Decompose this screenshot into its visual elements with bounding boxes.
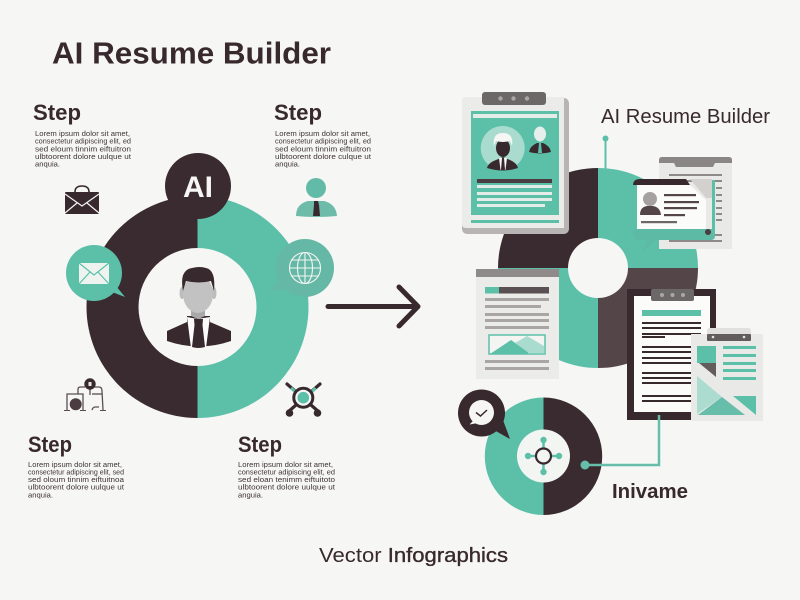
footer caption: Vector Infographics (319, 545, 508, 567)
icon: target with spokes (286, 384, 321, 417)
panel: small document (691, 328, 763, 421)
panel: clipboard (627, 289, 716, 420)
icon: person with tie (296, 178, 337, 217)
right heading: AI Resume Builder (601, 106, 770, 128)
step text: bottom right: ulbtoorent dolore uulque ut (238, 482, 336, 492)
step text: bottom left: Lorem ipsum dolor sit amet, (28, 460, 122, 469)
icon: network machine (64, 378, 106, 410)
step text: top right (274, 100, 372, 168)
step text: bottom left (28, 432, 125, 500)
step text: bottom right: consectetur adipiscing elit, ed (238, 468, 335, 476)
step text: bottom right: Lorem ipsum dolor sit amet, (238, 460, 333, 469)
icon: chat check bubble (458, 390, 510, 439)
pin above right donut (602, 136, 608, 170)
step text: bottom right (238, 432, 336, 500)
connector line (580, 415, 659, 470)
AI badge: AI (183, 171, 213, 204)
small donut chart (485, 398, 602, 515)
step text: top left (33, 100, 132, 168)
step text: top right: Step (274, 100, 322, 125)
panel: speech card with avatar (633, 179, 715, 252)
step text: bottom right: anguia. (238, 490, 263, 500)
icon: briefcase (65, 186, 99, 214)
left donut chart (87, 196, 309, 418)
title: AI Resume Builder (52, 36, 331, 70)
panel: profile card (462, 92, 569, 234)
step text: top right: Lorem ipsum dolor sit amet, (275, 129, 370, 138)
step text: top left: consectetur adipiscing elit, ed (35, 136, 131, 146)
panel: back document (659, 157, 732, 249)
step text: bottom right: Step (238, 432, 282, 457)
step text: top left: ulbtoorent dolore uulque ut (35, 152, 132, 161)
right donut chart (498, 168, 698, 368)
step text: top right: ulbtoorent dolore culque ut (275, 152, 372, 161)
arrow (328, 287, 418, 326)
step text: top right: sed eloum tinnim eiftuitron (275, 144, 371, 154)
icon: globe bubble (268, 239, 334, 297)
step text: top left: sed eloum tinnim eiftuitron (35, 144, 131, 154)
panel: article document (476, 269, 559, 379)
icon: mail bubble (66, 245, 125, 301)
step text: bottom left: consectetur adipiscing elit, sed (28, 468, 124, 476)
step text: bottom left: anquia. (28, 490, 53, 500)
AI badge (165, 153, 231, 219)
step text: bottom right: sed eloan tenimm eiftuitoto (238, 475, 335, 484)
step text: top right: anquia. (275, 160, 300, 168)
step text: bottom left: Step (28, 432, 72, 457)
step text: top left: Step (33, 100, 81, 125)
icon: businessman (167, 267, 231, 348)
icon: network hub (525, 437, 562, 475)
label: Inivame: Inivame (612, 481, 688, 503)
step text: bottom left: sed oloum tinnim eiftuitnoa (28, 475, 125, 484)
step text: top left: Lorem ipsum dolor sit amet, (35, 129, 130, 138)
step text: top left: anquia. (35, 160, 60, 168)
step text: top right: consectetur adipiscing elit, ed (275, 136, 371, 146)
step text: bottom left: ulbtoorent dolore uulque ut (28, 482, 125, 492)
